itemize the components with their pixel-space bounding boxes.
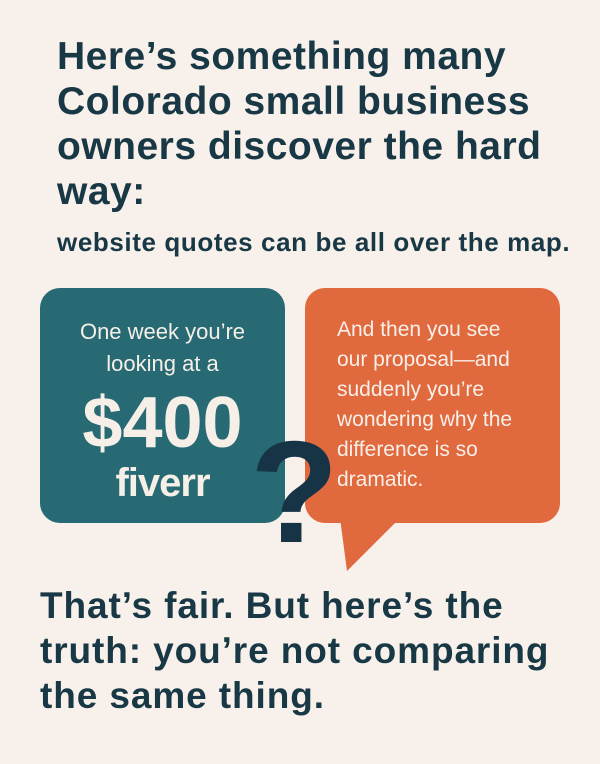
text: proposal: difference is so [337,438,478,461]
closing statement: That’s fair. But here’s the truth: you’re not comparing the same thing. [40,585,549,716]
text: one week: looking at a [106,351,219,376]
panel: teal box [40,288,285,523]
text: one week: One week you’re [80,319,245,344]
text: proposal: our proposal—and [337,348,510,371]
title: Here’s something many Colorado small business owners discover the hard way: [57,35,541,213]
panel: orange speech bubble [305,288,560,571]
icon: question mark: ? [250,411,339,573]
text: proposal [337,318,512,491]
text: proposal: And then you see [337,318,500,341]
text: proposal: suddenly you’re [337,378,484,401]
text: proposal: dramatic. [337,468,423,491]
text: fiverr: fiverr [115,461,210,505]
text: proposal: wondering why the [337,408,512,431]
text: one week [80,319,245,376]
text: price: $400 [82,383,243,463]
subtitle: website quotes can be all over the map. [57,227,570,257]
